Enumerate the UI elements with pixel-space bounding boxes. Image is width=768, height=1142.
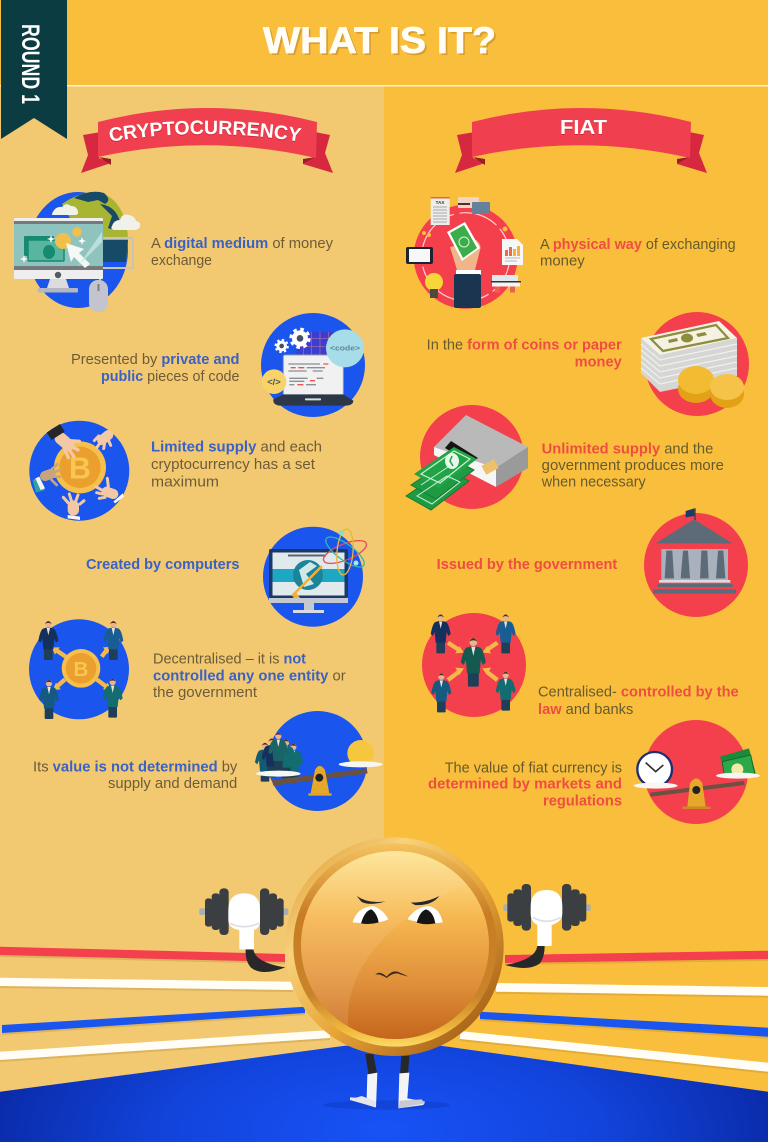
boxing ring: ropes xyxy=(0,947,768,1074)
text: limited supply: cryptocurrency has a set xyxy=(151,457,315,473)
text: unlimited supply: when necessary xyxy=(541,475,646,491)
round banner: ROUND 1 xyxy=(16,24,44,104)
coin character xyxy=(199,837,591,1110)
boxing ring: floor xyxy=(0,1046,768,1142)
icon: hand holding money with documents: TAX xyxy=(436,200,444,205)
panel: cryptocurrency background xyxy=(0,86,384,1142)
icon: laptop and code xyxy=(261,313,365,417)
ribbon: fiat xyxy=(455,108,707,173)
round banner xyxy=(1,0,67,139)
text: digital medium: exchange xyxy=(151,253,212,269)
icon: centralised people xyxy=(422,613,526,717)
text: value of fiat currency: determined by markets and xyxy=(428,776,622,792)
icon: laptop and code: </> xyxy=(267,377,281,387)
icon: computer and atom xyxy=(263,527,369,627)
panel: fiat background xyxy=(384,86,768,1142)
character: left arm and dumbbell xyxy=(199,888,288,972)
icon: scale with people and coin xyxy=(255,711,383,811)
icon: money printer xyxy=(406,405,528,510)
icon: scale with clock and cash xyxy=(634,720,760,824)
text: decentralised xyxy=(153,651,346,701)
icon: laptop and code: <code> xyxy=(330,344,360,353)
text: private and public code: public pieces of code xyxy=(101,369,240,385)
header band xyxy=(0,0,768,86)
character: mouth xyxy=(375,971,409,978)
character: coin face xyxy=(301,851,489,1039)
icon: computer and globe xyxy=(14,192,140,312)
character: coin rim xyxy=(285,837,504,1056)
ribbon: cryptocurrency: CRYPTOCURRENCY xyxy=(110,120,302,141)
character: shadow xyxy=(323,1100,450,1110)
text: form of coins or paper money: money xyxy=(575,355,622,371)
text: physical way: A physical way of exchanging xyxy=(540,237,736,253)
text: digital medium xyxy=(151,236,334,269)
text: limited supply: maximum xyxy=(151,475,219,491)
text: decentralised: controlled any one entity or xyxy=(153,669,346,685)
character: right arm and dumbbell xyxy=(503,884,591,968)
text: centralised xyxy=(538,685,739,718)
character: legs xyxy=(350,1054,425,1108)
ribbon: fiat: FIAT xyxy=(560,117,607,139)
text: digital medium: A digital medium of money xyxy=(151,236,334,252)
ribbon: cryptocurrency xyxy=(81,108,333,173)
icon: hand holding money with documents xyxy=(406,197,523,309)
icon: hands and bitcoin: B xyxy=(69,451,91,485)
text: value of fiat currency: regulations xyxy=(543,794,622,810)
text: centralised: Centralised- controlled by the xyxy=(538,685,739,701)
text: private and public code xyxy=(71,352,240,385)
text: form of coins or paper money xyxy=(427,337,622,371)
text: issued by government: Issued by the government xyxy=(437,557,617,573)
character: coin inner rim xyxy=(293,843,497,1047)
icon: cash stack and coins xyxy=(641,312,749,416)
icon: government building xyxy=(644,508,748,617)
text: value of fiat currency: The value of fiat currency is xyxy=(445,760,622,776)
text: limited supply: Limited supply and each xyxy=(151,440,322,456)
text: unlimited supply: government produces more xyxy=(542,458,724,474)
text: limited supply xyxy=(151,440,322,491)
character: right eye and brow xyxy=(407,896,443,924)
text: unlimited supply xyxy=(541,441,724,491)
text: private and public code: Presented by private and xyxy=(71,352,240,368)
text: physical way xyxy=(540,237,736,270)
text: unlimited supply: Unlimited supply and the xyxy=(542,441,713,457)
text: created by computers: Created by computers xyxy=(86,557,240,573)
text: decentralised: Decentralised – it is not xyxy=(153,651,306,667)
title: WHAT IS IT? xyxy=(265,21,498,63)
text: value of fiat currency xyxy=(428,760,622,810)
icon: decentralised people and bitcoin xyxy=(29,619,129,719)
text: value not determined: supply and demand xyxy=(108,776,237,792)
text: form of coins or paper money: In the form of coins or paper xyxy=(427,337,622,353)
icon: hands and bitcoin xyxy=(29,421,129,521)
icon: decentralised people and bitcoin: B xyxy=(74,658,88,681)
text: centralised: law and banks xyxy=(538,702,633,718)
ribbon: cryptocurrency: CRYPTOCURRENCY xyxy=(110,122,302,142)
title: WHAT IS IT? xyxy=(263,19,496,61)
text: value not determined: Its value is not determined by xyxy=(33,760,238,776)
text: value not determined xyxy=(33,760,238,792)
text: decentralised: the government xyxy=(153,685,257,701)
text: physical way: money xyxy=(540,254,585,270)
character: left eye and brow xyxy=(353,896,388,924)
ribbon: fiat: FIAT xyxy=(560,118,607,140)
